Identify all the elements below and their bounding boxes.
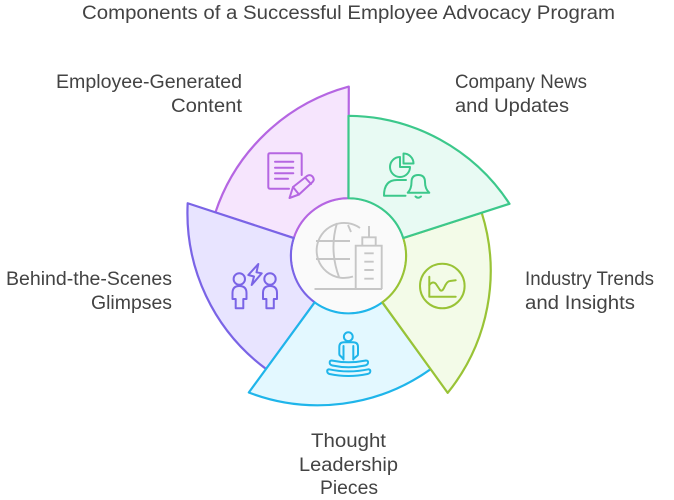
label: employee-generated content — [56, 72, 243, 117]
title: Components of a Successful Employee Advocacy Program — [82, 3, 615, 24]
label: behind-the-scenes glimpses — [6, 269, 172, 314]
segment: company news and updates — [348, 116, 510, 238]
label: thought leadership pieces: Leadership — [299, 455, 398, 476]
label: behind-the-scenes glimpses: Glimpses — [91, 293, 172, 314]
label: industry trends and insights — [525, 269, 654, 314]
label: industry trends and insights: Industry Trends — [525, 269, 654, 290]
label: industry trends and insights: and Insights — [525, 293, 635, 314]
label: thought leadership pieces: Thought — [311, 431, 387, 452]
icon: document and pencil — [268, 153, 314, 198]
segment: industry trends and insights — [365, 213, 531, 403]
segment: thought leadership pieces — [229, 270, 431, 464]
label: thought leadership pieces: Pieces — [320, 478, 378, 499]
label: company news and updates: Company News — [455, 72, 587, 93]
icon: globe and building — [314, 223, 382, 289]
label: employee-generated content: Content — [171, 96, 243, 117]
icon: meditating person — [327, 332, 370, 376]
segment: behind-the-scenes glimpses — [136, 176, 338, 369]
label: company news and updates: and Updates — [455, 96, 569, 117]
icon: pie chart, person and bell — [384, 154, 429, 198]
label: thought leadership pieces — [299, 431, 398, 499]
label: company news and updates — [455, 72, 587, 117]
label: behind-the-scenes glimpses: Behind-the-Scenes — [6, 269, 172, 290]
label: employee-generated content: Employee-Generated — [56, 72, 242, 93]
icon: two people with lightning bolt — [232, 264, 277, 308]
center circle — [292, 199, 405, 312]
segment: employee-generated content — [215, 59, 381, 250]
icon: trend chart in circle — [420, 264, 465, 308]
